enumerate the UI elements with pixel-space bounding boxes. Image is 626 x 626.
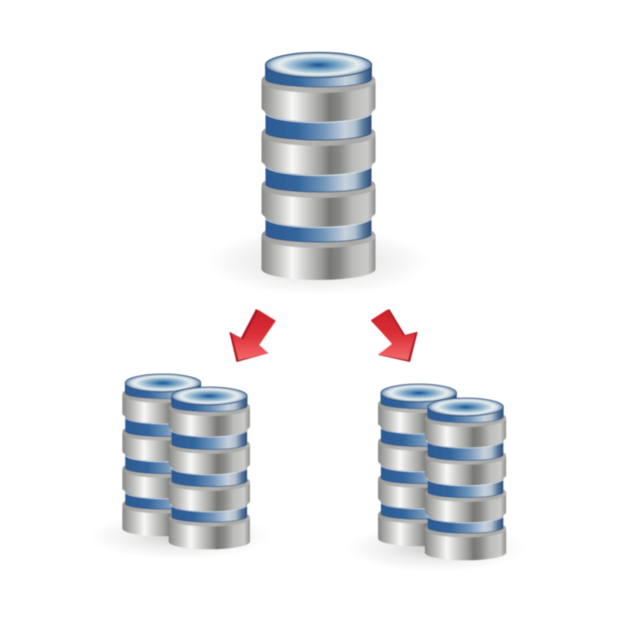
- shadow: left stacks: [90, 512, 270, 560]
- icon: right front database stack: [425, 398, 506, 560]
- icon: main database stack: [262, 52, 376, 280]
- icon: left back database stack: [122, 374, 204, 536]
- arrow: left red arrow: [229, 309, 276, 362]
- shadow: main stack: [206, 228, 430, 296]
- icon: right back database stack: [378, 384, 459, 546]
- icon: left front database stack: [169, 387, 250, 549]
- arrow: right red arrow: [371, 309, 418, 362]
- shadow: right stacks: [346, 524, 526, 572]
